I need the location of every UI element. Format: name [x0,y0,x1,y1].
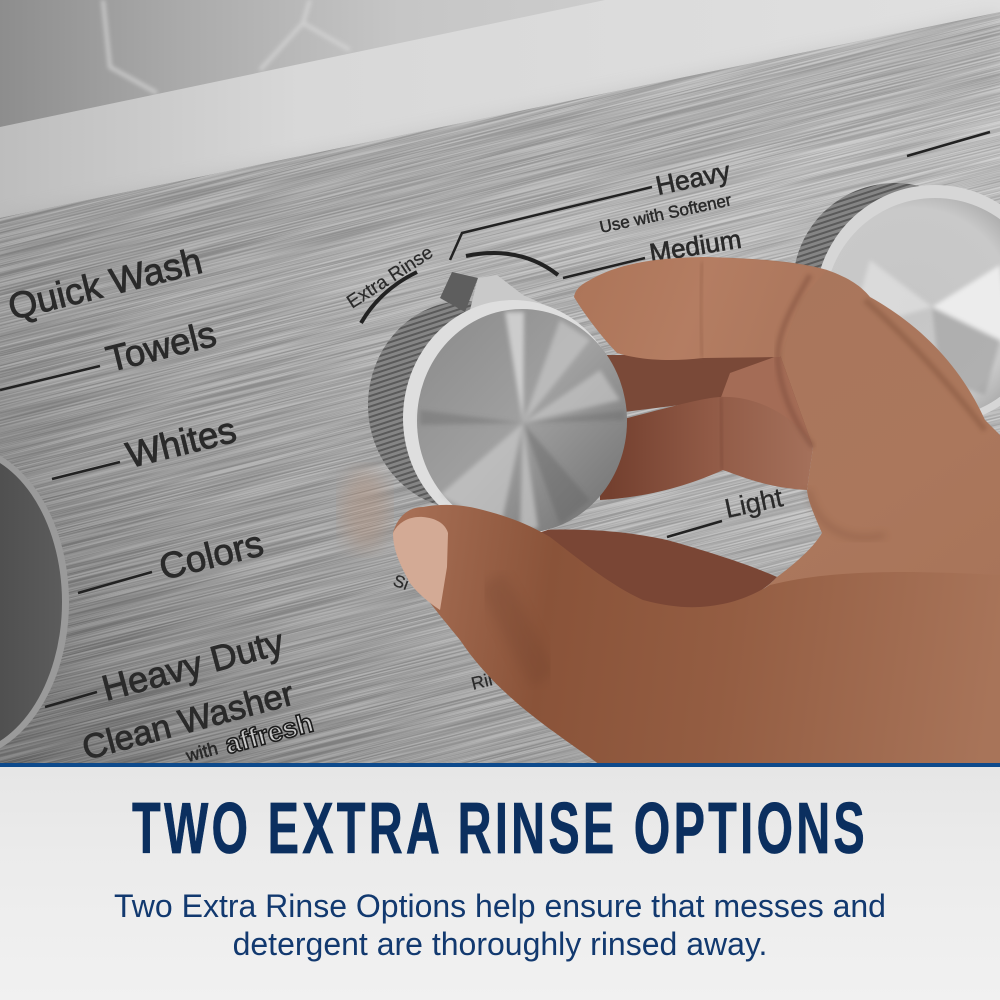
description text: detergent are thoroughly rinsed away. [233,926,767,962]
back of hand [560,257,1000,765]
little finger [540,529,777,612]
panel labels: Colors [155,522,267,588]
panel labels: Heavy Duty [97,621,288,709]
panel labels: affresh [222,708,317,760]
panel labels: Towels [102,313,220,380]
thumbnail [393,517,448,610]
white trim band [0,0,1000,218]
panel labels [4,156,786,768]
panel labels: Use with Softener [598,190,733,237]
wall tile [0,0,1000,300]
index finger [574,257,827,360]
panel labels: Rins [469,666,509,694]
panel labels: Medium [647,224,743,268]
description text: Two Extra Rinse Options help ensure that messes and [114,888,886,924]
panel labels: Clean Washer [78,675,298,765]
description text [114,888,886,962]
panel labels: Whites [122,409,240,476]
panel labels: Light [722,482,786,524]
middle finger knuckle [720,355,813,447]
middle finger [600,355,813,447]
thumb [393,505,1000,765]
centre knob [368,272,627,536]
panel labels: Quick Wash [4,240,206,328]
panel labels: Heavy [653,156,733,201]
label leader lines [0,132,990,707]
panel labels: Extra Rinse [343,242,437,313]
stainless control panel [0,12,1000,763]
panel labels: Si [391,571,411,594]
right knob [793,183,1000,425]
hand creases and shadows [490,262,985,680]
knob pointer [440,272,545,312]
caption panel [0,763,1000,1000]
left knob [0,444,69,760]
ring finger [600,397,813,500]
panel glow near thumb [341,470,389,550]
photo: hand turning washer knob [0,0,1000,765]
